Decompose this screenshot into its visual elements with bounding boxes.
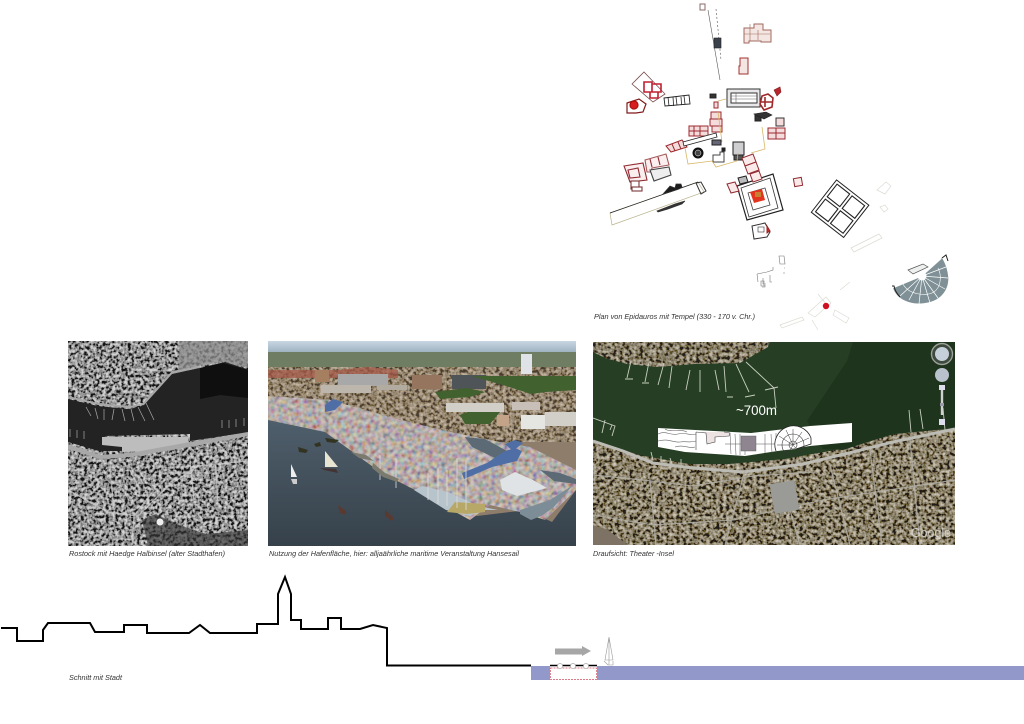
water — [268, 418, 576, 546]
plan: tholos — [692, 148, 704, 158]
light fields north east — [178, 341, 248, 372]
piers — [593, 361, 945, 465]
horizon land — [268, 352, 576, 367]
quay — [102, 437, 188, 452]
tall ships — [351, 452, 498, 516]
plan: yellow precinct outline — [685, 99, 765, 167]
plan: long stoa — [610, 182, 706, 225]
dark water patch — [200, 363, 248, 399]
plan: central red column of rooms — [666, 102, 785, 152]
navy ships — [520, 485, 573, 520]
plan: stacked red rooms beside temple — [727, 154, 803, 193]
water left — [531, 666, 550, 680]
plan: theatre — [892, 255, 948, 304]
dimension label: ~700m — [736, 403, 777, 418]
Google watermark: Google — [911, 525, 951, 540]
mid buildings — [315, 370, 486, 393]
map: Google Earth plan view — [593, 342, 955, 545]
section: city skyline — [1, 577, 531, 666]
white tents — [500, 472, 547, 496]
section: water level — [531, 637, 1024, 680]
festival ground — [268, 396, 576, 520]
caption: Hansesail: Nutzung der Hafenfläche, hier: alljaährliche maritime Veranstaltung Hansesail — [269, 549, 519, 558]
caption: Draufsicht: Draufsicht: Theater -Insel — [593, 549, 674, 558]
red roofs — [268, 367, 398, 378]
blue tents — [325, 399, 523, 479]
shore band — [68, 366, 248, 459]
waterfront buildings — [446, 402, 576, 429]
river bank left — [593, 525, 628, 545]
floating island — [550, 663, 597, 680]
city texture — [268, 367, 576, 442]
navigation controls — [932, 344, 952, 425]
water — [68, 362, 250, 451]
plan: dark hall and small courts — [683, 112, 772, 162]
plan: dark hall — [664, 94, 716, 106]
city base — [268, 367, 576, 522]
sky — [268, 341, 576, 352]
plan: Epidauros site plan — [594, 4, 948, 330]
plan: temple of Asklepios — [737, 174, 783, 220]
shore roads — [593, 429, 955, 472]
theatre island overlay — [658, 423, 852, 456]
north shore texture — [593, 342, 768, 367]
photo: Rostock aerial, black and white — [68, 341, 250, 546]
water right — [597, 666, 1024, 680]
city base — [593, 342, 955, 545]
caption: plan: Plan von Epidauros mit Tempel (330 - 170 v. Chr.) — [594, 312, 755, 321]
roads — [68, 456, 248, 546]
city texture — [68, 341, 248, 546]
darker water east — [807, 342, 955, 450]
plan: red altar — [823, 303, 829, 309]
arrow — [555, 646, 591, 656]
tower block — [521, 354, 532, 374]
plan: sanctuary north stoa — [727, 87, 781, 110]
photo: Hanse Sail harbour — [268, 341, 576, 546]
trees — [435, 376, 576, 424]
pond — [156, 518, 164, 526]
park — [142, 514, 248, 546]
piers — [70, 403, 244, 439]
plan: grey ruins south — [757, 256, 785, 287]
plan: pale outlying ruins — [780, 182, 891, 330]
plan: south-west rooms — [624, 154, 671, 191]
caption: section: Schnitt mit Stadt — [69, 673, 123, 682]
sailboat — [604, 637, 613, 665]
inner basin — [465, 437, 507, 459]
plan: western red cluster — [627, 72, 665, 113]
water — [593, 342, 955, 464]
parking lot — [770, 480, 799, 514]
plan: gymnasium — [811, 180, 869, 237]
plan: northern processional way — [700, 4, 721, 80]
caption: Rostock: Rostock mit Haedge Halbinsel (alter Stadthafen) — [69, 549, 225, 558]
city texture — [593, 430, 955, 545]
sailboats — [291, 438, 394, 521]
plan: south building — [752, 223, 770, 239]
photo base — [68, 341, 248, 546]
festival stalls texture — [268, 396, 576, 520]
plan: northern buildings — [739, 24, 771, 74]
